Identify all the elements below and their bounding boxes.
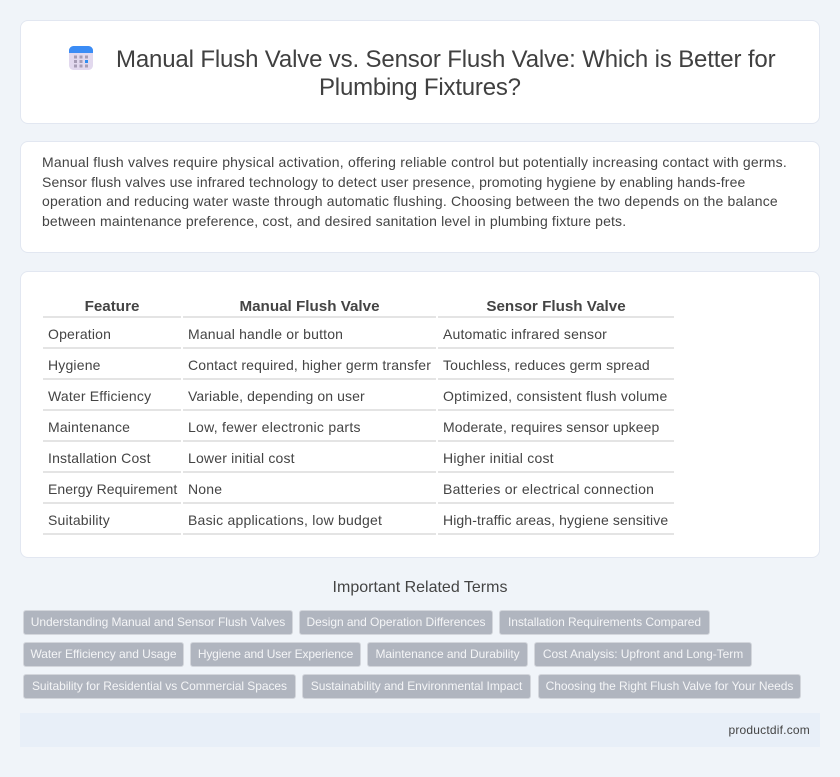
title: Plumbing Fixtures? [319, 74, 521, 101]
related term chips: Installation Requirements Compared [508, 615, 701, 629]
comparison table: Energy Requirement [48, 481, 177, 497]
comparison table: Higher initial cost [443, 450, 554, 466]
related term chips: Cost Analysis: Upfront and Long-Term [543, 647, 743, 661]
intro text: between maintenance preference, cost, and desired sanitation level in plumbing fixture pets. [42, 213, 626, 229]
comparison table: Batteries or electrical connection [443, 481, 654, 497]
comparison table: Variable, depending on user [188, 388, 365, 404]
comparison table: Basic applications, low budget [188, 512, 382, 528]
related term chips: Design and Operation Differences [307, 615, 485, 629]
intro panel [20, 141, 820, 253]
comparison table: Manual handle or button [188, 326, 343, 342]
comparison table: Touchless, reduces germ spread [443, 357, 650, 373]
comparison table: Installation Cost [48, 450, 151, 466]
comparison table: Moderate, requires sensor upkeep [443, 419, 659, 435]
comparison table: Feature [85, 298, 139, 315]
header card [20, 20, 820, 124]
related term chips: Hygiene and User Experience [198, 647, 353, 661]
comparison table [43, 298, 674, 535]
icon: calendar [69, 46, 93, 70]
comparison table: Low, fewer electronic parts [188, 419, 361, 435]
footer source text: productdif.com [728, 723, 810, 737]
related term chips: Suitability for Residential vs Commercial Spaces [32, 679, 287, 693]
intro text: Manual flush valves require physical activation, offering reliable control but potentially increasing contact with germs. [42, 154, 787, 170]
intro text: Sensor flush valves use infrared technology to detect user presence, promoting hygiene by enabling hands-free [42, 174, 745, 190]
related term chips: Water Efficiency and Usage [30, 647, 177, 661]
related term chips: Choosing the Right Flush Valve for Your Needs [546, 679, 793, 693]
comparison table: Contact required, higher germ transfer [188, 357, 431, 373]
related terms heading: Important Related Terms [333, 579, 507, 596]
comparison table: Sensor Flush Valve [486, 298, 626, 315]
comparison table: None [188, 481, 222, 497]
intro text [42, 154, 787, 229]
comparison table: Hygiene [48, 357, 101, 373]
comparison table: Optimized, consistent flush volume [443, 388, 667, 404]
intro text: operation and reducing water waste through automatic flushing. Choosing between the two depends on the balance [42, 193, 778, 209]
comparison table: High-traffic areas, hygiene sensitive [443, 512, 668, 528]
comparison table: Automatic infrared sensor [443, 326, 607, 342]
related term chips: Understanding Manual and Sensor Flush Valves [31, 615, 285, 629]
comparison table: Maintenance [48, 419, 130, 435]
footer bar [20, 713, 820, 747]
comparison table: Lower initial cost [188, 450, 295, 466]
title: Manual Flush Valve vs. Sensor Flush Valve: Which is Better for [116, 46, 775, 73]
related term chips [23, 610, 801, 699]
table panel [20, 271, 820, 558]
title [116, 46, 776, 101]
comparison table: Operation [48, 326, 111, 342]
comparison table: Manual Flush Valve [239, 298, 380, 315]
related term chips: Sustainability and Environmental Impact [311, 679, 522, 693]
comparison table: Water Efficiency [48, 388, 151, 404]
comparison table: Suitability [48, 512, 110, 528]
related term chips: Maintenance and Durability [375, 647, 520, 661]
